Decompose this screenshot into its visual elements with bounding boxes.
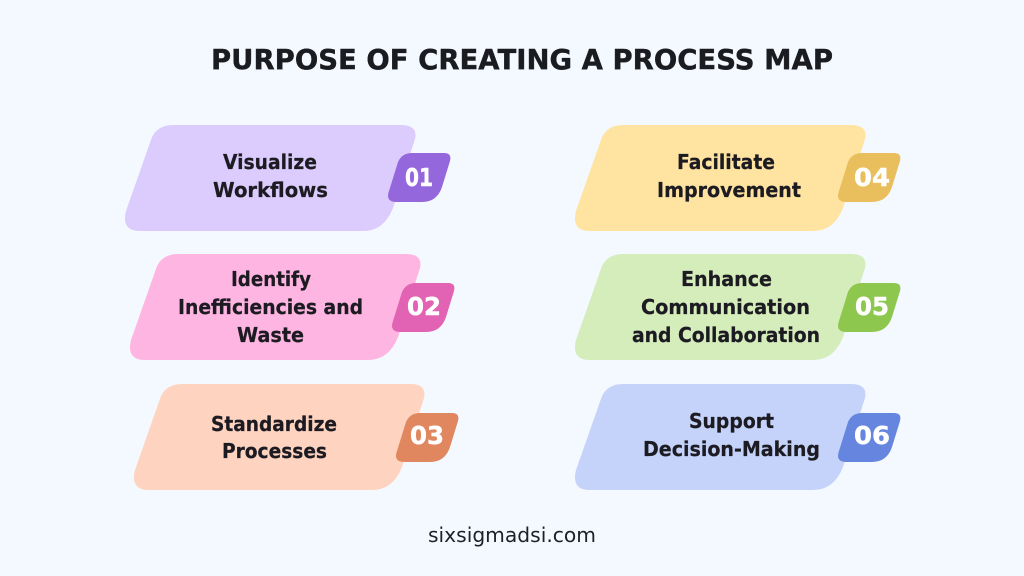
card label [632, 267, 820, 347]
card label: Workflows [213, 178, 328, 202]
card label: Processes [222, 439, 327, 463]
card label [657, 150, 801, 202]
card label: Visualize [223, 150, 317, 174]
panel: 01 Visualize Workflows [125, 125, 450, 231]
card label: Enhance [681, 267, 772, 291]
number badge [838, 153, 900, 202]
badge number: 05 [855, 292, 889, 321]
panel: 05 Enhance Communication and Collaboration [575, 254, 900, 360]
badge number: 06 [854, 421, 890, 450]
footer website: sixsigmadsi.com [428, 523, 596, 547]
card label: Facilitate [677, 150, 775, 174]
card label: Inefficiencies and [178, 295, 363, 319]
card shape [134, 384, 424, 490]
card shape [575, 254, 865, 360]
number badge [388, 153, 450, 202]
card shape [130, 254, 420, 360]
card label: Standardize [211, 412, 337, 436]
title: PURPOSE OF CREATING A PROCESS MAP [211, 43, 833, 76]
card label [213, 150, 328, 202]
number badge [838, 283, 900, 332]
card label: and Collaboration [632, 323, 820, 347]
badge number: 02 [407, 292, 441, 321]
panel: 02 Identify Inefficiencies and Waste [130, 254, 454, 360]
badge number: 03 [410, 421, 444, 450]
card label: Communication [641, 295, 810, 319]
panel: 04 Facilitate Improvement [575, 125, 900, 231]
card label: Identify [231, 267, 311, 291]
panel: 03 Standardize Processes [134, 384, 458, 490]
panel: 06 Support Decision-Making [575, 384, 900, 490]
badge number: 04 [854, 163, 890, 192]
card label: Improvement [657, 178, 801, 202]
card label: Decision-Making [643, 437, 820, 461]
number badge [392, 283, 454, 332]
card shape [575, 125, 865, 231]
card label [211, 412, 337, 463]
card shape [575, 384, 865, 490]
number badge [396, 413, 458, 462]
card label: Support [689, 409, 774, 433]
number badge [838, 413, 900, 462]
card shape [125, 125, 415, 231]
card label: Waste [237, 323, 304, 347]
badge number: 01 [405, 163, 433, 192]
card label [178, 267, 363, 347]
card label [643, 409, 820, 461]
